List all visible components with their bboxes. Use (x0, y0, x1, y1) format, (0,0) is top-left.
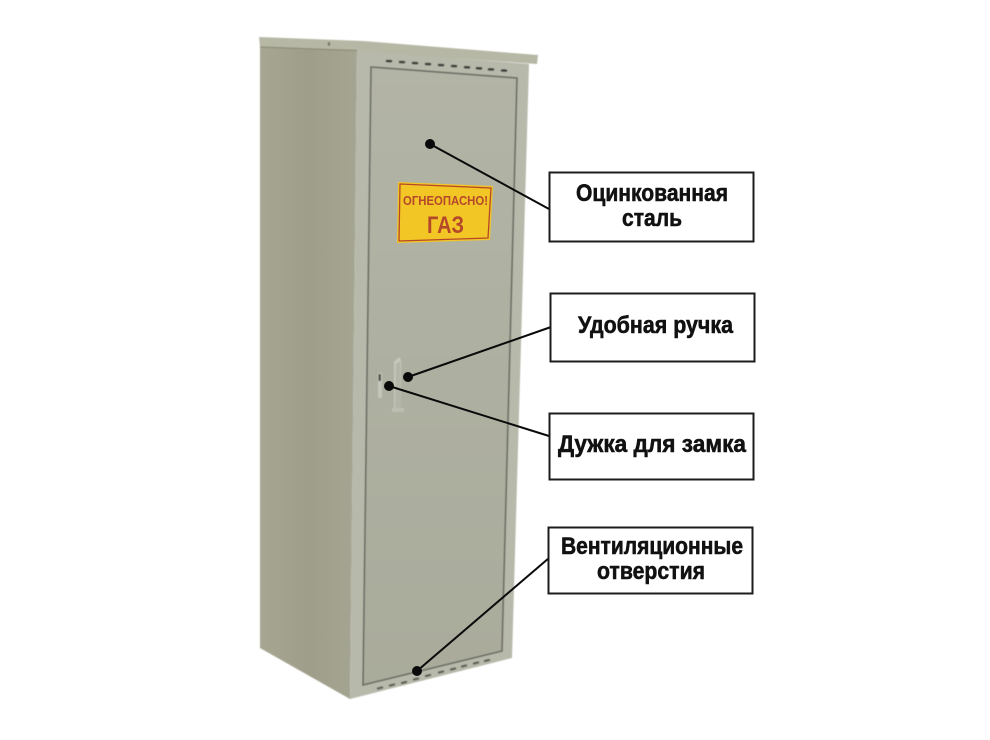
callout: ventilation holes (412, 528, 752, 676)
cabinet roof (259, 37, 538, 64)
callout: galvanized steel: Оцинкованная (576, 180, 728, 207)
cabinet front frame (350, 50, 529, 699)
door handle (392, 357, 404, 412)
callout: handle: Удобная ручка (578, 312, 734, 339)
cabinet side panel (260, 47, 357, 699)
lock shackle (378, 373, 382, 398)
callout: galvanized steel: сталь (622, 205, 682, 232)
callout: ventilation holes: отверстия (597, 558, 705, 585)
top ventilation holes (387, 61, 506, 71)
warning sign: ОГНЕОПАСНО! (403, 194, 488, 208)
warning sign (397, 182, 493, 243)
door (363, 67, 517, 685)
callout: galvanized steel (425, 139, 754, 242)
bottom ventilation holes (378, 660, 489, 688)
callout: handle (403, 294, 754, 382)
cabinet (259, 37, 538, 699)
warning sign: ГАЗ (427, 212, 464, 239)
callout: lock shackle (384, 381, 754, 480)
callout: lock shackle: Дужка для замка (558, 431, 747, 458)
callout: ventilation holes: Вентиляционные (561, 533, 743, 560)
